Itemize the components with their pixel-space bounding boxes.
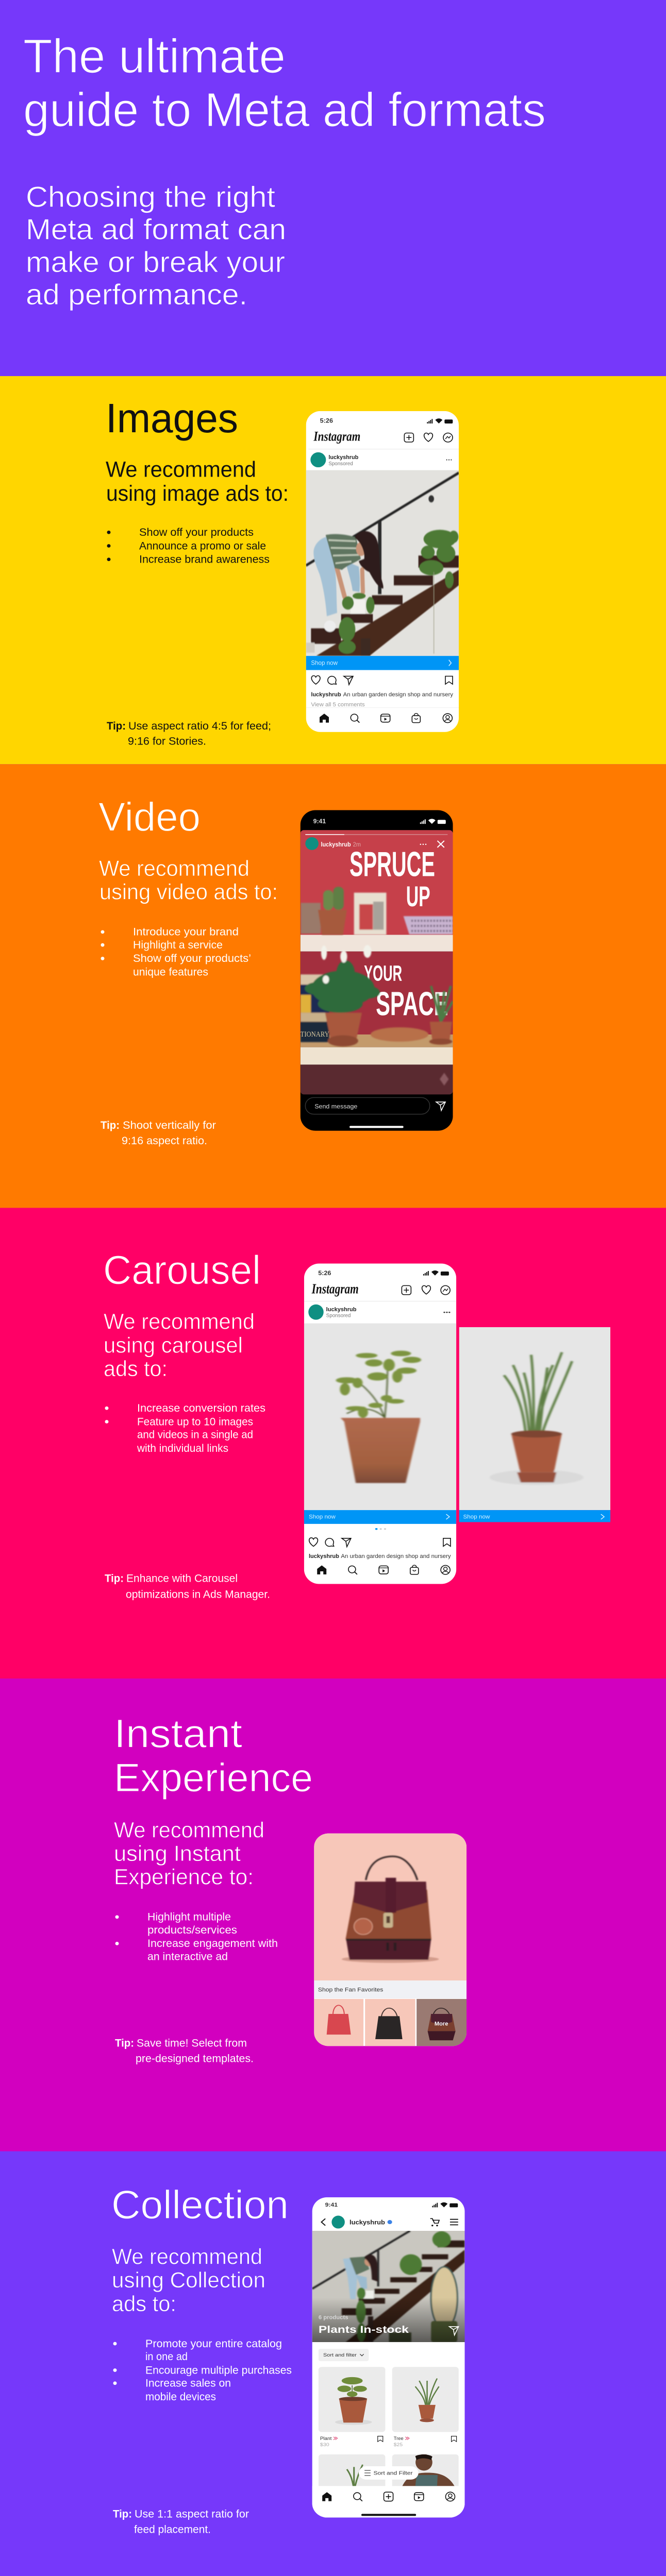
bullet list: video: Introduce your brand — [133, 925, 239, 938]
phone: instagram image ad: luckyshrub — [311, 692, 341, 698]
phone: carousel ad first card: 5:26 — [318, 1270, 331, 1277]
tip: carousel — [105, 1572, 270, 1601]
phone: carousel ad first card: Sponsored — [326, 1313, 351, 1318]
phone: story video ad: 9:41 — [313, 818, 326, 825]
phone: collection ad: luckyshrub — [349, 2219, 385, 2226]
instant experience card — [314, 1834, 467, 2046]
tip: collection: Use 1:1 aspect ratio for — [135, 2507, 249, 2520]
product card: plant: $30 — [320, 2443, 329, 2448]
bullet list: video: Highlight a service — [133, 938, 223, 951]
bullet list: collection: in one ad — [145, 2350, 188, 2363]
filter pill: Sort and filter — [323, 2353, 357, 2358]
video frame: shelves: SPRUCE — [349, 845, 435, 884]
panel: images — [0, 376, 666, 764]
bullet list: collection: Increase sales on — [145, 2377, 231, 2389]
bullet list: instant experience — [115, 1910, 278, 1962]
product card: tree: Tree — [394, 2436, 404, 2442]
heading: video: Video — [98, 794, 201, 839]
video frame: shelves — [301, 830, 453, 1094]
tip: instant experience: Save time! Select from — [137, 2037, 247, 2049]
tip: instant experience — [115, 2037, 254, 2065]
phone: collection ad: 9:41 — [325, 2202, 338, 2208]
heading: carousel: Carousel — [103, 1247, 261, 1293]
bullet list: carousel — [105, 1401, 265, 1454]
subheading: instant experience: using Instant — [114, 1842, 241, 1866]
call to action: shop now — [306, 656, 459, 670]
subheading: carousel: ads to: — [104, 1357, 168, 1381]
bullet list: carousel: and videos in a single ad — [137, 1428, 253, 1441]
photo: woman on stairs — [306, 470, 459, 656]
tip: images: 9:16 for Stories. — [128, 735, 206, 747]
heading: instant experience — [114, 1711, 313, 1800]
title: guide to Meta ad formats — [23, 83, 546, 137]
bullet list: carousel: Increase conversion rates — [137, 1401, 265, 1414]
panel: carousel — [0, 1208, 666, 1679]
product card: plant: Plant — [320, 2436, 332, 2442]
bullet list: collection — [113, 2337, 292, 2403]
thumbnail: more: More — [435, 2021, 448, 2027]
call to action: shop now: Shop now — [311, 660, 338, 667]
subheading: collection — [112, 2245, 265, 2316]
thumbnail: more — [417, 1999, 467, 2046]
subheading: instant experience: Experience to: — [114, 1865, 254, 1890]
subheading: video: using video ads to: — [99, 880, 278, 905]
phone: story video ad — [301, 810, 453, 1131]
panel: intro — [0, 0, 666, 376]
subheading: carousel — [104, 1310, 255, 1381]
bullet list: collection: Promote your entire catalog — [145, 2337, 282, 2350]
phone: instagram image ad: View all 5 comments — [311, 702, 365, 708]
tip: video: Tip: — [101, 1118, 120, 1131]
tip: carousel: Enhance with Carousel — [126, 1572, 238, 1584]
tip: images — [107, 719, 271, 747]
subheading: images: We recommend — [106, 457, 256, 482]
bullet list: images — [107, 526, 270, 565]
intro text — [26, 181, 286, 311]
bullet list: collection: mobile devices — [145, 2390, 216, 2403]
hero photo: woman on stairs — [312, 2231, 465, 2342]
hero text: 6 products — [319, 2315, 348, 2320]
tip: instant experience: pre-designed templates. — [136, 2052, 254, 2065]
product card: plant — [319, 2367, 385, 2448]
phone: carousel ad first card: Instagram — [311, 1281, 359, 1297]
subheading: video — [99, 857, 278, 905]
tip: video: Shoot vertically for — [123, 1118, 216, 1131]
tip: images: Use aspect ratio 4:5 for feed; — [128, 719, 271, 732]
bullet list: carousel: with individual links — [137, 1442, 228, 1454]
panel: video — [0, 764, 666, 1208]
heading: instant experience: Instant — [114, 1711, 242, 1756]
video frame: shelves: UP — [406, 880, 430, 912]
carousel second card: Shop now — [463, 1514, 490, 1520]
heading: collection: Collection — [111, 2182, 289, 2227]
phone: story video ad: luckyshrub — [321, 841, 351, 848]
bullet list: instant experience: Highlight multiple — [147, 1910, 231, 1923]
phone: instagram image ad: Sponsored — [328, 461, 353, 466]
tip: carousel: optimizations in Ads Manager. — [126, 1588, 270, 1601]
product row two — [319, 2454, 459, 2496]
phone: instagram image ad — [306, 411, 459, 732]
hero text — [319, 2315, 459, 2335]
bullet list: carousel: Feature up to 10 images — [137, 1415, 253, 1428]
phone: carousel ad first card: luckyshrub — [309, 1553, 339, 1559]
message bar: Send message — [314, 1103, 358, 1110]
product card: tree: $25 — [394, 2443, 403, 2448]
bullet list: video: unique features — [133, 965, 208, 978]
phone: carousel ad first card — [304, 1264, 456, 1584]
section label: Shop the Fan Favorites — [318, 1987, 384, 1993]
call to action: shop now — [304, 1510, 456, 1524]
phone: instagram image ad: Instagram — [313, 429, 360, 444]
panel: collection — [0, 2151, 666, 2576]
bullet list: video — [101, 925, 251, 978]
phone: carousel ad first card: luckyshrub — [326, 1306, 357, 1312]
bullet list: instant experience: an interactive ad — [147, 1950, 228, 1962]
bullet list: video: Show off your products’ — [133, 952, 251, 964]
subheading: carousel: using carousel — [104, 1333, 243, 1358]
video frame: shelves: SPACE — [376, 986, 448, 1022]
message bar — [305, 1097, 445, 1114]
carousel second card — [459, 1327, 610, 1522]
tip: video: 9:16 aspect ratio. — [122, 1134, 207, 1147]
tip: collection: Tip: — [113, 2507, 132, 2520]
bullet list: instant experience: Increase engagement with — [147, 1937, 278, 1950]
hero text: Plants In-stock — [319, 2324, 409, 2335]
phone: collection ad — [312, 2197, 465, 2518]
bullet list: collection: Encourage multiple purchases — [145, 2364, 292, 2376]
intro text: Meta ad format can — [26, 213, 286, 246]
floating sort and filter button — [359, 2466, 419, 2480]
intro text: Choosing the right — [26, 181, 275, 213]
tip: images: Tip: — [107, 719, 126, 732]
phone: instagram image ad: luckyshrub — [328, 454, 358, 461]
tip: collection — [113, 2507, 249, 2535]
thumbnail: black bag — [365, 1999, 415, 2046]
subheading: collection: We recommend — [112, 2245, 262, 2269]
subheading: collection: ads to: — [112, 2292, 176, 2316]
bullet list: images: Announce a promo or sale — [139, 539, 266, 552]
bullet list: images: Show off your products — [139, 526, 254, 538]
bullet list: images: Increase brand awareness — [139, 553, 270, 565]
video frame: shelves: YOUR — [364, 961, 402, 986]
tip: instant experience: Tip: — [115, 2037, 134, 2049]
bullet list: instant experience: products/services — [147, 1923, 237, 1936]
panel: instant experience — [0, 1679, 666, 2151]
section label — [314, 1980, 467, 1998]
product card: tree — [392, 2367, 459, 2448]
phone: instagram image ad: 5:26 — [320, 418, 333, 425]
heading: images: Images — [106, 396, 238, 442]
tip: video — [101, 1118, 216, 1147]
title: The ultimate — [23, 29, 286, 83]
subheading: instant experience: We recommend — [114, 1818, 264, 1842]
filter pill — [319, 2349, 369, 2361]
title — [23, 29, 546, 137]
subheading: instant experience — [114, 1818, 264, 1890]
tip: carousel: Tip: — [105, 1572, 124, 1584]
product photo: backpack — [342, 1856, 439, 1963]
intro text: make or break your — [26, 246, 285, 279]
subheading: video: We recommend — [99, 857, 249, 881]
thumbnail: red bag — [314, 1999, 363, 2046]
phone: instagram image ad: An urban garden design shop and nursery — [343, 692, 453, 698]
tip: collection: feed placement. — [134, 2523, 211, 2535]
subheading: images: using image ads to: — [106, 482, 289, 506]
subheading: collection: using Collection — [112, 2268, 265, 2293]
heading: instant experience: Experience — [114, 1755, 313, 1800]
floating sort and filter button: Sort and Filter — [373, 2470, 413, 2476]
intro text: ad performance. — [26, 279, 247, 311]
product photo: potted plant — [304, 1324, 456, 1510]
subheading: carousel: We recommend — [104, 1310, 255, 1334]
phone: story video ad: 2m — [353, 841, 361, 848]
video frame: shelves: TIONARY — [301, 1030, 329, 1039]
call to action: shop now: Shop now — [309, 1514, 336, 1520]
phone: carousel ad first card: An urban garden design shop and nursery — [341, 1553, 451, 1559]
subheading: images — [106, 457, 289, 506]
